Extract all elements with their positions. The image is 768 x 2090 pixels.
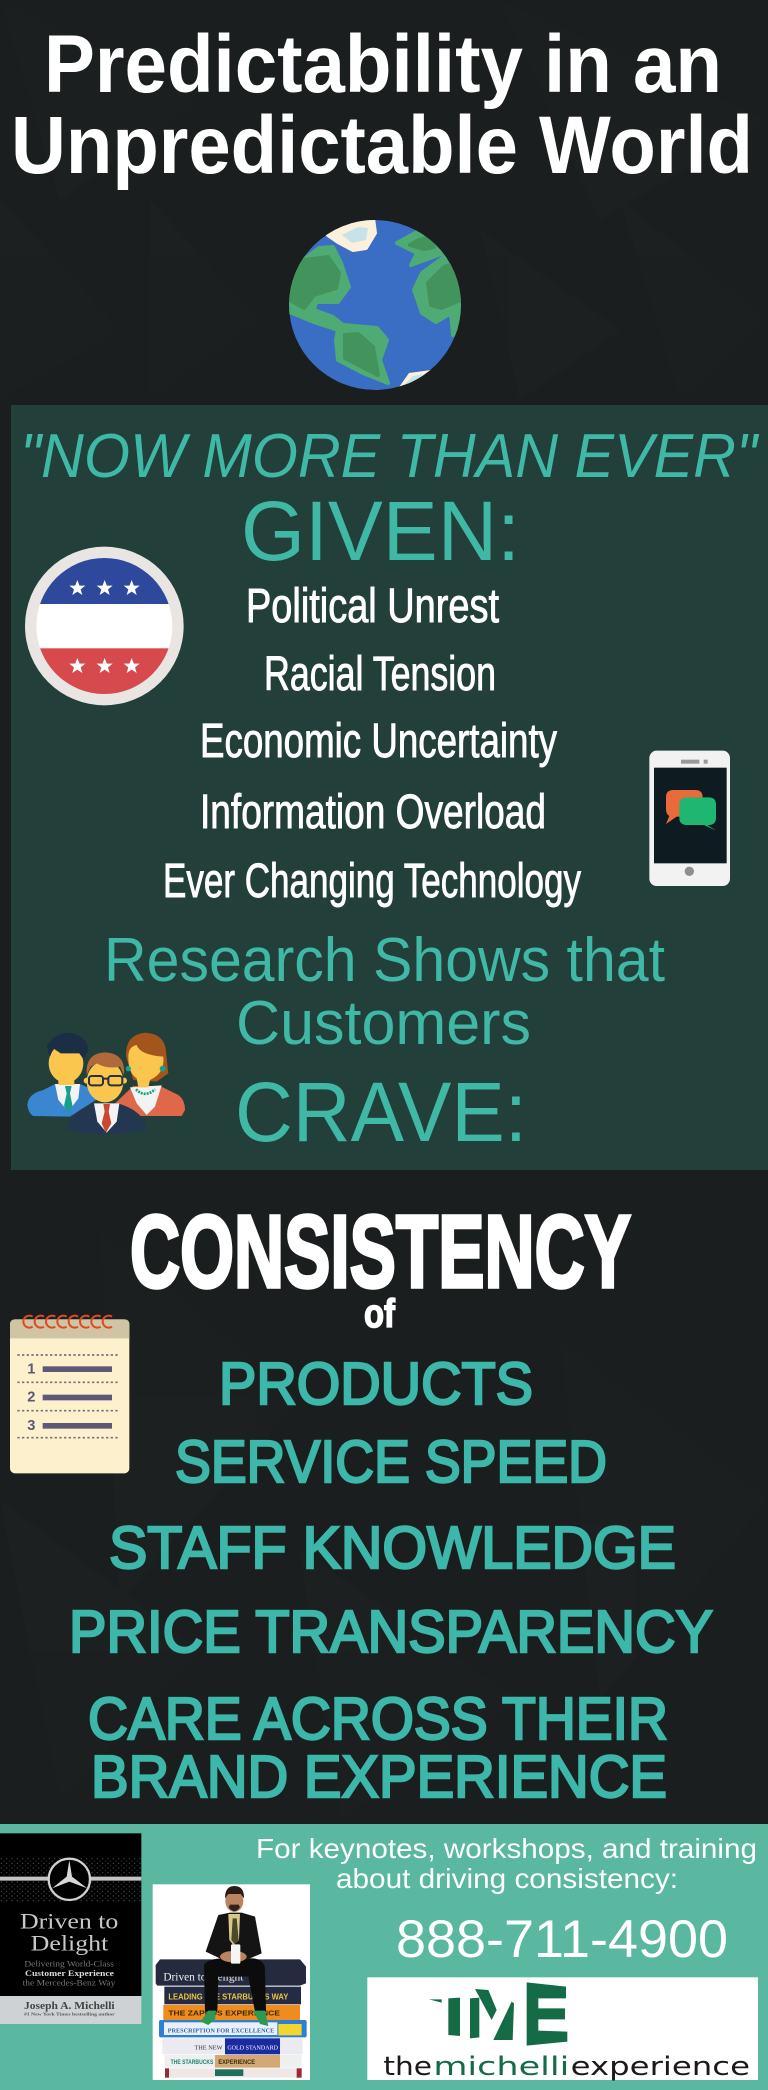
icon: numbered notepad: 2 [27,1390,35,1406]
icon: numbered notepad: 3 [27,1418,35,1434]
research text: Research Shows that [104,926,665,995]
icon: flag badge [25,547,184,705]
photo: author sitting on stack of books: THE STARBUCKS [171,2059,214,2066]
photo: author sitting on stack of books: GOLD STANDARD [227,2044,278,2051]
book cover: Driven to Delight [0,1833,141,2024]
icon: globe [289,220,461,390]
title: Predictability in an [44,19,722,110]
icon: three customers [27,1033,185,1134]
photo: author sitting on stack of books: EXPERIENCE [218,2059,255,2066]
list of consistency categories: BRAND EXPERIENCE [91,1744,667,1810]
logo: the michelli experience: experience [571,2051,750,2081]
given list: Political Unrest [246,580,499,633]
photo: author sitting on stack of books: THE ZAPPOS EXPERIENCE [168,2008,280,2017]
contact text: about driving consistency: [336,1863,678,1894]
panel: now more than ever [11,405,768,1170]
book cover: Driven to Delight: Delivering World-Class [24,1960,114,1969]
given list: Racial Tension [264,648,496,701]
given list: Economic Uncertainty [200,715,557,768]
contact text [256,1833,757,1894]
photo: author sitting on stack of books: Driven to Delight [163,1970,244,1984]
photo: author sitting on stack of books: PRESCRIPTION FOR EXCELLENCE [168,2027,275,2034]
list of consistency categories: SERVICE SPEED [175,1429,607,1495]
logo: the michelli experience: michelli [433,2051,569,2081]
icon: smartphone with chat bubbles [649,751,730,886]
book cover: Driven to Delight: Joseph A. Michelli [24,2001,115,2012]
photo: author sitting on stack of books [153,1884,310,2080]
book cover: Driven to Delight: the Mercedes-Benz Way [23,1979,115,1988]
icon: numbered notepad: 1 [27,1361,35,1377]
book cover: Driven to Delight: #1 New York Times bestselling author [24,2012,115,2017]
research text [104,926,665,1058]
book cover: Driven to Delight: Driven to [20,1908,118,1933]
title [11,19,753,191]
phone number: 888-711-4900 [396,1910,728,1969]
icon: numbered notepad [10,1316,129,1473]
logo: the michelli experience [367,1977,758,2081]
quote heading: "NOW MORE THAN EVER" [20,422,760,491]
of label: of [364,1292,396,1336]
photo: author sitting on stack of books: THE NEW [194,2044,223,2051]
list of consistency categories: CARE ACROSS THEIR [88,1686,668,1752]
book cover: Driven to Delight: Delight [31,1931,109,1956]
list of consistency categories [69,1351,713,1810]
given list: Ever Changing Technology [163,855,581,908]
list of consistency categories: STAFF KNOWLEDGE [109,1515,676,1581]
logo: the michelli experience: the [383,2051,432,2081]
list of consistency categories: PRODUCTS [219,1351,533,1417]
contact text: For keynotes, workshops, and training [256,1833,757,1864]
list of consistency categories: PRICE TRANSPARENCY [69,1599,713,1665]
book cover: Driven to Delight: Customer Experience [25,1969,115,1978]
crave heading: CRAVE: [235,1065,527,1159]
given list: Information Overload [200,786,546,839]
panel: footer [0,1824,768,2090]
photo: author sitting on stack of books: LEADING THE STARBUCKS WAY [168,1992,289,2001]
research text: Customers [236,989,531,1058]
given heading: GIVEN: [241,484,520,578]
given list [163,580,581,908]
